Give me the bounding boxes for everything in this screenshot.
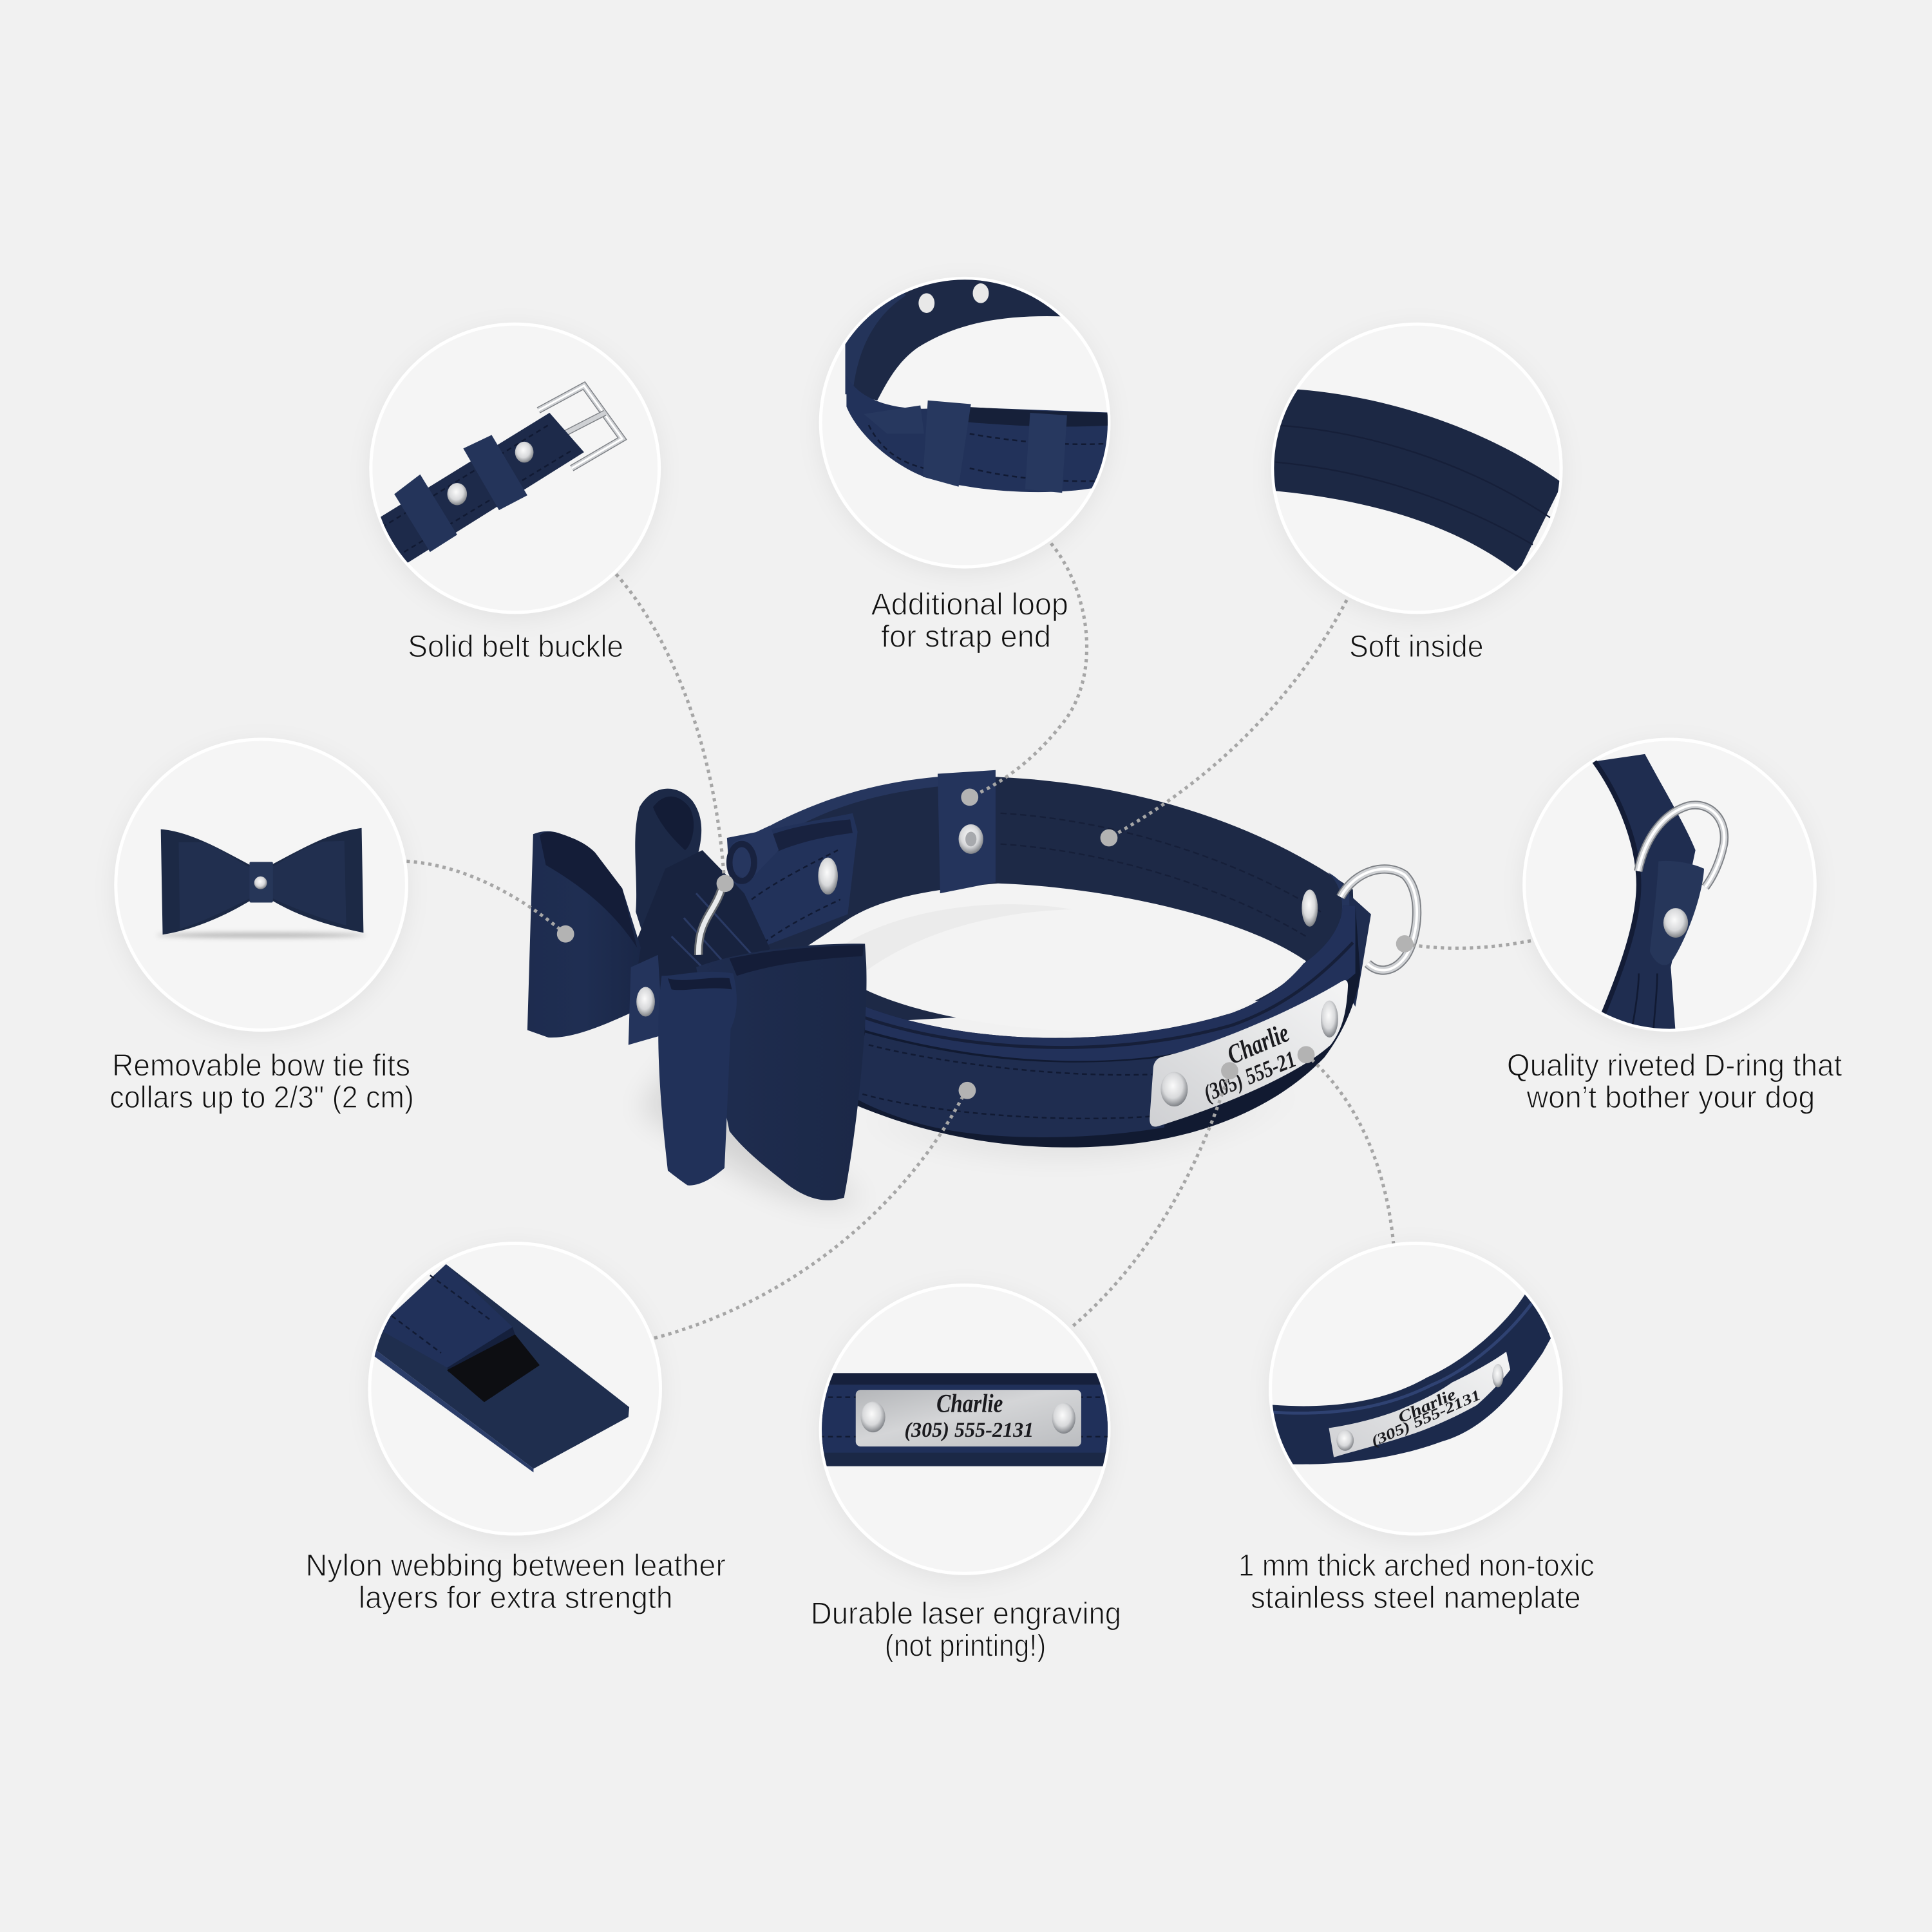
caption: Additional loop (871, 588, 1068, 622)
front band rim (865, 905, 1356, 1061)
caption: won’t bother your dog (1526, 1081, 1815, 1115)
D-ring strap and ring (1341, 869, 1417, 1007)
panel: additional loop (820, 274, 1115, 654)
caption: Quality riveted D-ring that (1507, 1048, 1842, 1083)
front band panel (853, 1032, 1164, 1137)
buckle end of strap (727, 813, 858, 955)
centre mass of layered leather (629, 850, 770, 1004)
caption (1507, 1048, 1842, 1115)
panel: removable bow tie (109, 739, 414, 1115)
caption: Nylon webbing between leather (305, 1549, 726, 1583)
photo: engraved plate: (305) 555-2131 (904, 1419, 1034, 1442)
panel: stainless steel nameplate (1238, 1243, 1595, 1615)
photo: arched nameplate: (305) 555-2131 (1368, 1387, 1483, 1450)
photo: engraved plate (813, 1373, 1115, 1466)
nameplate (1150, 980, 1348, 1126)
caption: stainless steel nameplate (1251, 1581, 1581, 1615)
caption: 1 mm thick arched non-toxic (1238, 1549, 1595, 1583)
photo: arched nameplate (1269, 1294, 1555, 1464)
leader lines (406, 544, 1534, 1338)
caption (305, 1549, 726, 1615)
photo: suede lining (1269, 390, 1562, 573)
nameplate: (305) 555-21 (1200, 1046, 1300, 1106)
caption (871, 588, 1068, 654)
marker dots (557, 788, 1414, 1099)
panel: soft inside (1269, 324, 1562, 664)
photo: D-ring (1595, 754, 1724, 1035)
caption (1238, 1549, 1595, 1615)
caption: (not printing!) (885, 1629, 1046, 1663)
photo: arched nameplate: Charlie (1396, 1386, 1459, 1426)
panel: nylon webbing (305, 1243, 726, 1615)
panel: riveted D-ring (1507, 739, 1842, 1115)
strap keeper loop (938, 770, 996, 893)
photo: bow tie (156, 828, 366, 938)
panel: laser engraving (811, 1285, 1121, 1663)
caption: collars up to 2/3" (2 cm) (109, 1081, 414, 1115)
photo: buckle strap (370, 386, 622, 579)
caption: Removable bow tie fits (112, 1048, 410, 1083)
side rivets (1302, 889, 1318, 927)
back suede band (727, 776, 1356, 1023)
caption: layers for extra strength (359, 1581, 673, 1615)
caption (811, 1597, 1121, 1663)
nameplate: Charlie (1223, 1018, 1294, 1070)
caption: Solid belt buckle (408, 630, 623, 664)
main collar with bow tie (527, 770, 1417, 1204)
bow tie on collar (527, 789, 867, 1200)
photo: nylon webbing (370, 1264, 629, 1472)
panel: solid belt buckle (370, 324, 659, 664)
top rim (739, 775, 973, 857)
collar opening (807, 884, 1306, 1032)
caption: for strap end (881, 620, 1051, 654)
collar ground shadow (641, 907, 1306, 1204)
front band outer (850, 905, 1360, 1148)
photo: keeper loops (845, 274, 1115, 493)
photo: engraved plate: Charlie (936, 1389, 1003, 1418)
caption: Durable laser engraving (811, 1597, 1121, 1631)
caption: Soft inside (1349, 630, 1484, 664)
caption (109, 1048, 414, 1115)
